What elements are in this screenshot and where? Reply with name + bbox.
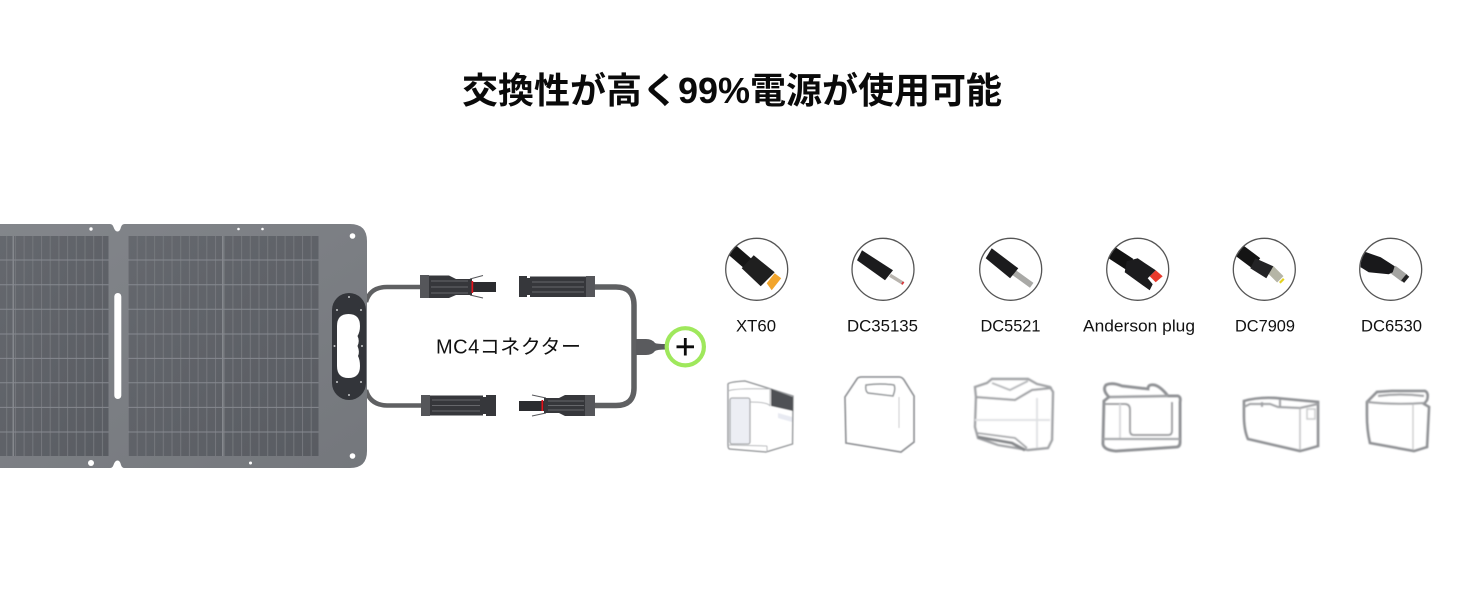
power station 5 [1244, 398, 1318, 451]
icon: DC7909 plug [1233, 238, 1295, 300]
panel frame [0, 224, 367, 468]
icon: DC35135 plug [852, 238, 914, 300]
power station 4 [1103, 384, 1180, 451]
connector option: XT60 [726, 238, 788, 336]
connector option: DC7909 [1233, 238, 1295, 336]
power station 3 [975, 379, 1053, 450]
mounting holes [88, 227, 355, 466]
connector: bottom right male MC4 [519, 395, 595, 416]
icon: green plus badge [667, 328, 704, 365]
icon: DC5521 plug [980, 238, 1042, 300]
power station 2 [845, 377, 914, 452]
label: DC5521: DC5521 [980, 318, 1040, 336]
connector: top right female MC4 [519, 276, 595, 297]
icon: XT60 plug [726, 238, 788, 300]
connector option: DC6530 [1360, 238, 1422, 336]
power station 1 [728, 381, 793, 452]
title: 交換性が高く99%電源が使用可能 [462, 70, 1002, 111]
label: DC7909: DC7909 [1235, 318, 1295, 336]
connector label: MC4コネクター [436, 336, 581, 358]
icon: DC6530 plug [1360, 238, 1422, 300]
right solar cells [128, 236, 318, 456]
centre slot [114, 293, 121, 399]
label: DC35135: DC35135 [847, 318, 918, 336]
carry handle [332, 293, 366, 400]
label: XT60: XT60 [736, 318, 776, 336]
connector: top left male MC4 [420, 275, 496, 298]
cable junction [636, 339, 666, 355]
power station 6 [1367, 391, 1429, 451]
connector option: Anderson plug [1083, 238, 1195, 336]
connector: bottom left female MC4 [421, 395, 496, 416]
cable: MC4 Y-harness [366, 287, 634, 406]
icon: Anderson plug [1107, 238, 1169, 300]
label: Anderson plug: Anderson plug [1083, 318, 1195, 336]
label: DC6530: DC6530 [1361, 318, 1422, 336]
solar panel [0, 224, 367, 468]
connector option: DC5521 [980, 238, 1042, 336]
connector option: DC35135 [847, 238, 918, 336]
left solar cells [0, 236, 108, 456]
